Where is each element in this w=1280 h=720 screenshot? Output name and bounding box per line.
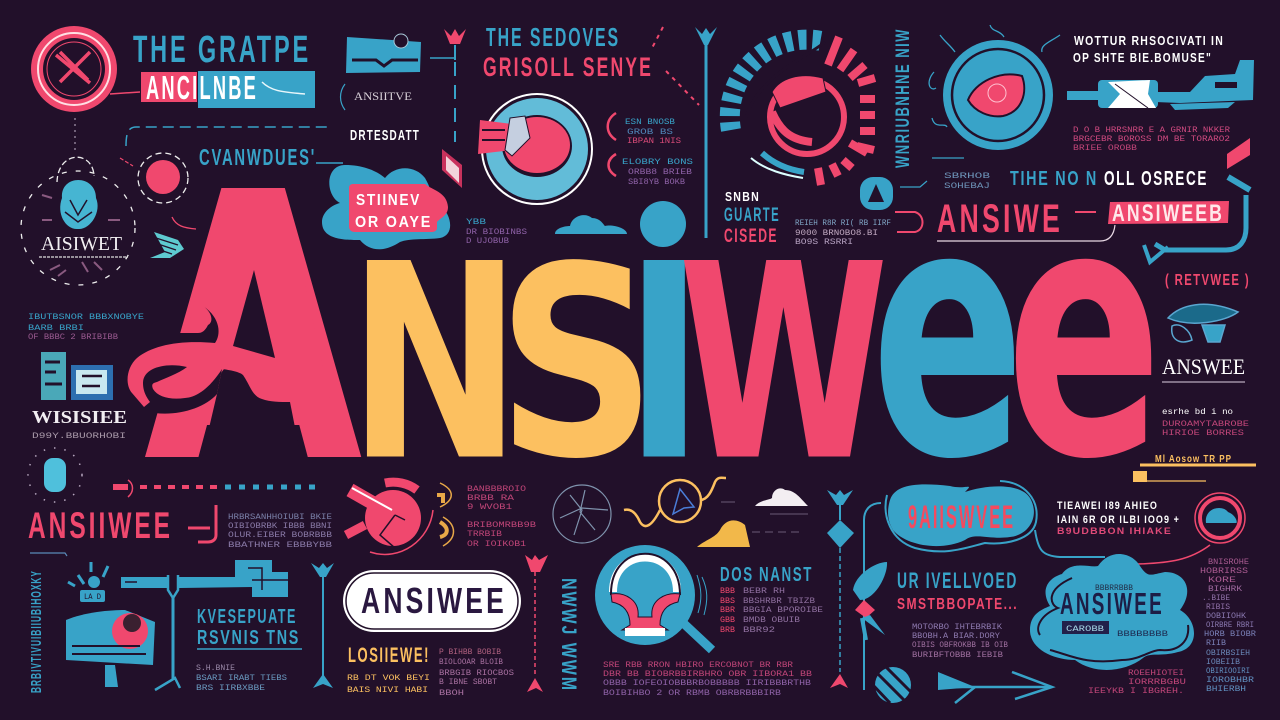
heading: THE NO N OLL OSRECE: OLL OSRECE: [1104, 168, 1208, 190]
text block: small list with pink brackets: IBPAN 1NIS: [627, 137, 681, 146]
text column right: DOBIIOHK: [1206, 612, 1246, 621]
small label: DRTESDATT: DRTESDATT: [350, 127, 420, 144]
arrow: cyan to the right: [938, 672, 1052, 703]
text block: four small lines: OIBIOBRBK IBBB BBNI: [228, 522, 332, 531]
callout cloud: STIINEV OR OAYE: OR OAYE: [355, 214, 432, 231]
list: five small rows: BBR92: [743, 626, 775, 635]
dotted progress row: [113, 480, 322, 497]
text block: four small lines: [912, 623, 1008, 660]
dotted pink accents: [651, 27, 699, 105]
text block: below cloud: IEEYKB I IBGREH.: [1088, 687, 1184, 696]
list: five small rows: [720, 587, 823, 635]
icon: magnifier with arch: [595, 545, 712, 650]
arrow: pink fork with cyan dashed stem: [430, 29, 466, 142]
text block: three small lines: BRS IIRBXBBE: [196, 684, 265, 693]
paragraph: four small lines: BOIBIHBO 2 OR RBMB OBRBRBBBIRB: [603, 689, 781, 698]
small label: ANSWTCVE: [340, 84, 412, 110]
icon: blue vessel: [1168, 304, 1238, 342]
small note: SBRHOB: SOHEBAJ: [944, 182, 990, 191]
icon: yellow skyline bar: [1133, 454, 1256, 482]
icon: striped ball: [872, 665, 912, 703]
text block: left notes: IBUTBSNOR BBBXNOBYE: [28, 313, 144, 322]
text block: ANSWEE: ANSWEE: [1162, 354, 1245, 379]
text block: five small lines: BIOLOOAR BLOIB: [439, 658, 503, 667]
text block: small list with pink brackets: [608, 113, 693, 187]
text column right: BNISROHE: [1208, 558, 1249, 567]
text block: small note: D UJOBUB: [466, 237, 509, 246]
paragraph: four small lines: OBBB IOFEOIOBBBRBOBBBBB IIRIBBBRTHB: [603, 679, 811, 688]
text block: left notes: [28, 313, 144, 342]
icon: book with pink circle: [66, 610, 155, 687]
text: WOTTUR RHSOCIVATI IN: WOTTUR RHSOCIVATI IN: [1074, 33, 1224, 48]
icon: cyan aircraft shape: [1067, 60, 1254, 110]
icon: two monitors: [41, 352, 113, 400]
small caption: D99Y.BBUORHOBI: [32, 432, 126, 441]
icon: cyan badge with triangle: [860, 177, 927, 232]
speech bubble: pink word on cyan: [886, 481, 1037, 551]
text column right: BIGHRK: [1208, 585, 1242, 594]
text block: small note: DR BIOBINBS: [466, 228, 527, 237]
text column right: RIIB: [1206, 639, 1226, 648]
text block: three small lines: BO9S RSRRI: [795, 238, 853, 247]
text block: five small lines: P BIHBB BOBIB: [439, 648, 501, 657]
text block: five small lines: BRBGIB RIOCBOS: [439, 669, 514, 678]
heading: THE GRATPE: THE GRATPE: [133, 29, 311, 71]
text block: below cloud: [1088, 669, 1186, 696]
icon: cyan dot: [640, 201, 686, 247]
list: five small rows: BMDB OBUIB: [743, 616, 800, 625]
text block: four small lines: OLUR.EIBER BOBRBBB: [228, 531, 332, 540]
pill label: ANSIWEE: [343, 570, 521, 632]
text block: four small lines: BBATHNER EBBBYBB: [228, 541, 332, 550]
text block: below cloud: ROEEHIOTEI: [1128, 669, 1184, 678]
text column right: OBIRBSIEH: [1206, 649, 1250, 658]
cloud: ANSIWEE: CAROBB: [1066, 625, 1104, 634]
letter N: N: [348, 207, 522, 520]
icon: yellow mound: [697, 520, 803, 547]
text block: four small lines: BURIBFTOBBB IEBIB: [912, 651, 1003, 660]
text block: white and pink lines: TIEAWEI I89 AHIEO: [1057, 500, 1158, 512]
text block: four small lines: BBOBH.A BIAR.DORY: [912, 632, 1000, 641]
text block: two small groups: BRIBOMRBB9B: [467, 521, 536, 530]
heading yellow: LOSIIEWE: [347, 644, 430, 695]
icon: pink pipe: [188, 505, 216, 542]
text column right: HORB BIOBR: [1204, 630, 1256, 639]
divider line: [30, 553, 67, 556]
text block: four small lines: [228, 513, 332, 550]
label: ANSIWEEB: ANSIWEEB: [1112, 200, 1224, 227]
text block: five small lines: B IBNE SBOBT: [439, 678, 497, 687]
text block: two small groups: 9 WVOB1: [467, 503, 512, 512]
text block: white and pink lines: [1057, 500, 1180, 536]
text column right: RIBIS: [1206, 603, 1230, 612]
list: five small rows: BBS: [720, 597, 735, 606]
heading: DOS NANST: DOS NANST: [720, 564, 813, 586]
text block: five small lines: [439, 648, 514, 698]
icon: pink ring with dome: [1138, 493, 1245, 564]
callout cloud: STIINEV OR OAYE: STIINEV: [356, 192, 421, 209]
letter e (blue): e: [871, 132, 1025, 536]
icon: grey wheel: [553, 485, 611, 543]
arrow: cyan vertical with diamond: [827, 490, 854, 688]
text column right: OBIRIOOIRI: [1206, 667, 1250, 676]
text block: two small groups: [467, 485, 536, 549]
text block: four small lines: HRBRSANHHOIUBI BKIE: [228, 513, 332, 522]
letter e (pink): e: [1006, 133, 1162, 536]
small note: SBRHOB: [944, 172, 990, 191]
text block: esrhe lines: HIRIOE BORRES: [1162, 429, 1244, 438]
heading: SMSTBBOPATE: SMSTBBOPATE...: [897, 596, 1018, 613]
text block: small list with pink brackets: ELOBRY BONS: [622, 158, 693, 167]
icon: bulb with rays: [68, 562, 108, 602]
heading yellow: LOSIIEWE: BAIS NIVI HABI: [347, 686, 428, 695]
text block: three small lines: [196, 664, 287, 693]
text block: small note: [466, 218, 527, 246]
icon: cyan glasses panel: [346, 34, 421, 73]
heading: RSVNIS TNS: RSVNIS TNS: [197, 627, 300, 649]
text block: pink lines: BRGCEBR BOROSS DM BE TORARO2: [1073, 135, 1230, 144]
list: five small rows: BBR: [720, 606, 735, 615]
text block: SNBN GUARTE CISEDE: SNBN: [725, 189, 760, 204]
icon: striped cyan card: [150, 217, 196, 258]
cloud: ANSIWEE: ANSIWEE: [1060, 586, 1164, 621]
icon: yellow brackets: [437, 483, 454, 546]
heading: GRISOLL SENYE: GRISOLL SENYE: [483, 52, 653, 82]
cloud: ANSIWEE: BBBBBBBB: [1117, 630, 1168, 639]
paragraph: four small lines: [603, 661, 812, 698]
text column right: HOBRIRSS: [1200, 567, 1248, 576]
icon: small cloud: [555, 215, 627, 234]
letter S: S: [497, 211, 657, 517]
speech bubble: pink word on cyan: 9AIISWVEE: [908, 499, 1015, 535]
text block: two small groups: BRBB RA: [467, 494, 514, 503]
icon: cyan circle with pink eye: [929, 25, 1060, 158]
arrow: cyan vertical line: [695, 27, 717, 238]
text column right: BHIERBH: [1206, 685, 1246, 694]
small note: SBRHOB: SBRHOB: [944, 172, 990, 181]
icon: radial dial with helmet: [730, 37, 875, 185]
pill label: ANSIWEE: ANSIWEE: [361, 580, 507, 621]
heading: CVANWDUES: CVANWDUES': [199, 144, 316, 170]
text block: small list with pink brackets: SBI8YB BOKB: [628, 178, 685, 187]
text block: esrhe lines: esrhe bd i no: [1162, 408, 1233, 417]
text block: below cloud: IORRRBGBU: [1128, 678, 1186, 687]
connector: cyan line to cloud: [1035, 530, 1105, 557]
paragraph: four small lines: SRE RBB RRON HBIRO ERCOBNOT BR RBR: [603, 661, 793, 670]
callout cloud: STIINEV OR OAYE: [322, 165, 450, 249]
text block: SNBN GUARTE CISEDE: GUARTE: [724, 205, 780, 226]
text column right: IOBEIIB: [1206, 658, 1240, 667]
list: five small rows: BBB: [720, 587, 735, 596]
cloud: ANSIWEE: BBBRRBBB: [1095, 584, 1133, 593]
text block: pink lines: [1073, 126, 1230, 153]
text block: pink lines: D O B HRRSNRR E A GRNIR NKKER: [1073, 126, 1230, 135]
text block: white and pink lines: IAIN 6R OR ILBI IOO9 +: [1057, 514, 1180, 526]
text block: pink lines: BRIEE OROBB: [1073, 144, 1137, 153]
list: five small rows: BBSHRBR TBIZB: [743, 597, 815, 606]
text block: small list with pink brackets: ESN BNOSB: [625, 118, 675, 127]
icon: cyan mechanical arm: [121, 560, 288, 690]
label: ANCILNBE: ANCILNBE: [146, 69, 258, 106]
icon: pink hammer disc: [346, 482, 433, 554]
text column right: OIRBRE RBRI: [1206, 621, 1254, 630]
arrow: cyan vertical: [311, 563, 334, 688]
text block: three small lines: BSARI IRABT TIEBS: [196, 674, 287, 683]
text block: three small lines: REIEH R8R RI( RB IIRF: [795, 219, 891, 228]
text block: three small lines: [795, 219, 891, 247]
list: five small rows: BEBR RH: [743, 587, 785, 596]
icon: bulb with rays: LA D: [84, 593, 101, 602]
heading yellow: LOSIIEWE: LOSIIEWE!: [348, 644, 430, 667]
text block: esrhe lines: DUROAMYTABROBE: [1162, 420, 1249, 429]
letter I: I: [623, 207, 705, 520]
small label: ANSWTCVE: ANSIITVE: [354, 89, 412, 103]
text block: two small groups: BANBBBROIO: [467, 485, 526, 494]
text block: small list with pink brackets: ORBB8 BRIEB: [628, 168, 692, 177]
text block: SNBN GUARTE CISEDE: [724, 189, 780, 247]
text block: three small lines: S.H.BNIE: [196, 664, 235, 673]
connector dashes: [75, 118, 330, 150]
heading: ANSIWE: ANSIWE: [937, 197, 1063, 241]
label: WISISIEE: WISISIEE: [32, 407, 127, 427]
icon: crossed circle badge: [31, 26, 140, 112]
text block: four small lines: MOTORBO IHTEBRBIK: [912, 623, 1002, 632]
icon: head with dashed ring and AISIWET: AISIWET: [41, 233, 122, 255]
text block: small list with pink brackets: GROB BS: [627, 128, 673, 137]
cloud: ANSIWEE: [1030, 554, 1194, 670]
text block: four small lines: OIBIS OBFROKBB IB OIB: [912, 641, 1008, 650]
icon: small tilted pink card: [442, 149, 462, 188]
text column right: ..BIBE: [1202, 594, 1230, 603]
text block: five small lines: BBOH: [439, 689, 464, 698]
icon: line with scissors: [853, 503, 887, 690]
list: five small rows: GBB: [720, 616, 735, 625]
vertical text: BRBIVTIVUIBIIUBIHOXKY: [28, 570, 45, 693]
heading: KVESEPUATE: KVESEPUATE: [197, 606, 297, 628]
list: five small rows: BRB: [720, 626, 735, 635]
text block: two small groups: OR IOIKOB1: [467, 540, 526, 549]
text block: SNBN GUARTE CISEDE: CISEDE: [724, 226, 778, 247]
text: OP SHTE BIE.BOMUSE: OP SHTE BIE.BOMUSE": [1073, 50, 1212, 65]
text column right: KORE: [1208, 576, 1236, 585]
letter W: W: [678, 207, 889, 521]
letter A with swash: A: [144, 115, 365, 545]
heading: UR IVELLVOED: UR IVELLVOED: [897, 568, 1018, 593]
icon: small head with dotted ring: [28, 448, 82, 502]
text block: left notes: BARB BRBI: [28, 324, 84, 333]
heading: THE NO N OLL OSRECE: TIHE NO N: [1010, 168, 1098, 190]
text column right: IOROBHBR: [1206, 676, 1254, 685]
heading: ANSIIWEE: ANSIIWEE: [28, 505, 173, 546]
text block: small note: YBB: [466, 218, 486, 227]
list: five small rows: BBGIA BPOROIBE: [743, 606, 823, 615]
icon: head with dashed ring and AISIWET: [21, 157, 135, 285]
icon: pink blob in dashed ring: [120, 153, 188, 203]
text block: two small groups: TRRBIB: [467, 530, 502, 539]
text block: white and pink lines: B9UDBBON IHIAKE: [1057, 526, 1172, 536]
text block: three small lines: 9000 BRNOBO8.BI: [795, 229, 878, 238]
icon: plate with pink sphere: [478, 94, 592, 204]
paragraph: four small lines: DBR BB BIOBRBBIRBHRO OBR IIBORA1 BB: [603, 670, 812, 679]
heading: THE NO N OLL OSRECE: [1010, 168, 1208, 190]
heading yellow: LOSIIEWE: RB DT VOK BEYI: [347, 674, 430, 683]
heading: THE SEDOVES: THE SEDOVES: [486, 22, 620, 52]
icon: yellow wave with lens: [624, 478, 726, 526]
text block: esrhe lines: [1162, 408, 1249, 438]
text block: left notes: OF BBBC 2 BRIBIBB: [28, 333, 118, 342]
title: giant word ANSIWEE: [128, 115, 1162, 545]
icon: yellow skyline bar: Ml Aosow TR PP: [1155, 454, 1232, 465]
icon: white cloud: [721, 488, 808, 514]
text column right: [1200, 558, 1256, 694]
icon: pipe with pink tag: [1144, 138, 1250, 262]
arrow: pink vertical dashed: [525, 555, 548, 692]
